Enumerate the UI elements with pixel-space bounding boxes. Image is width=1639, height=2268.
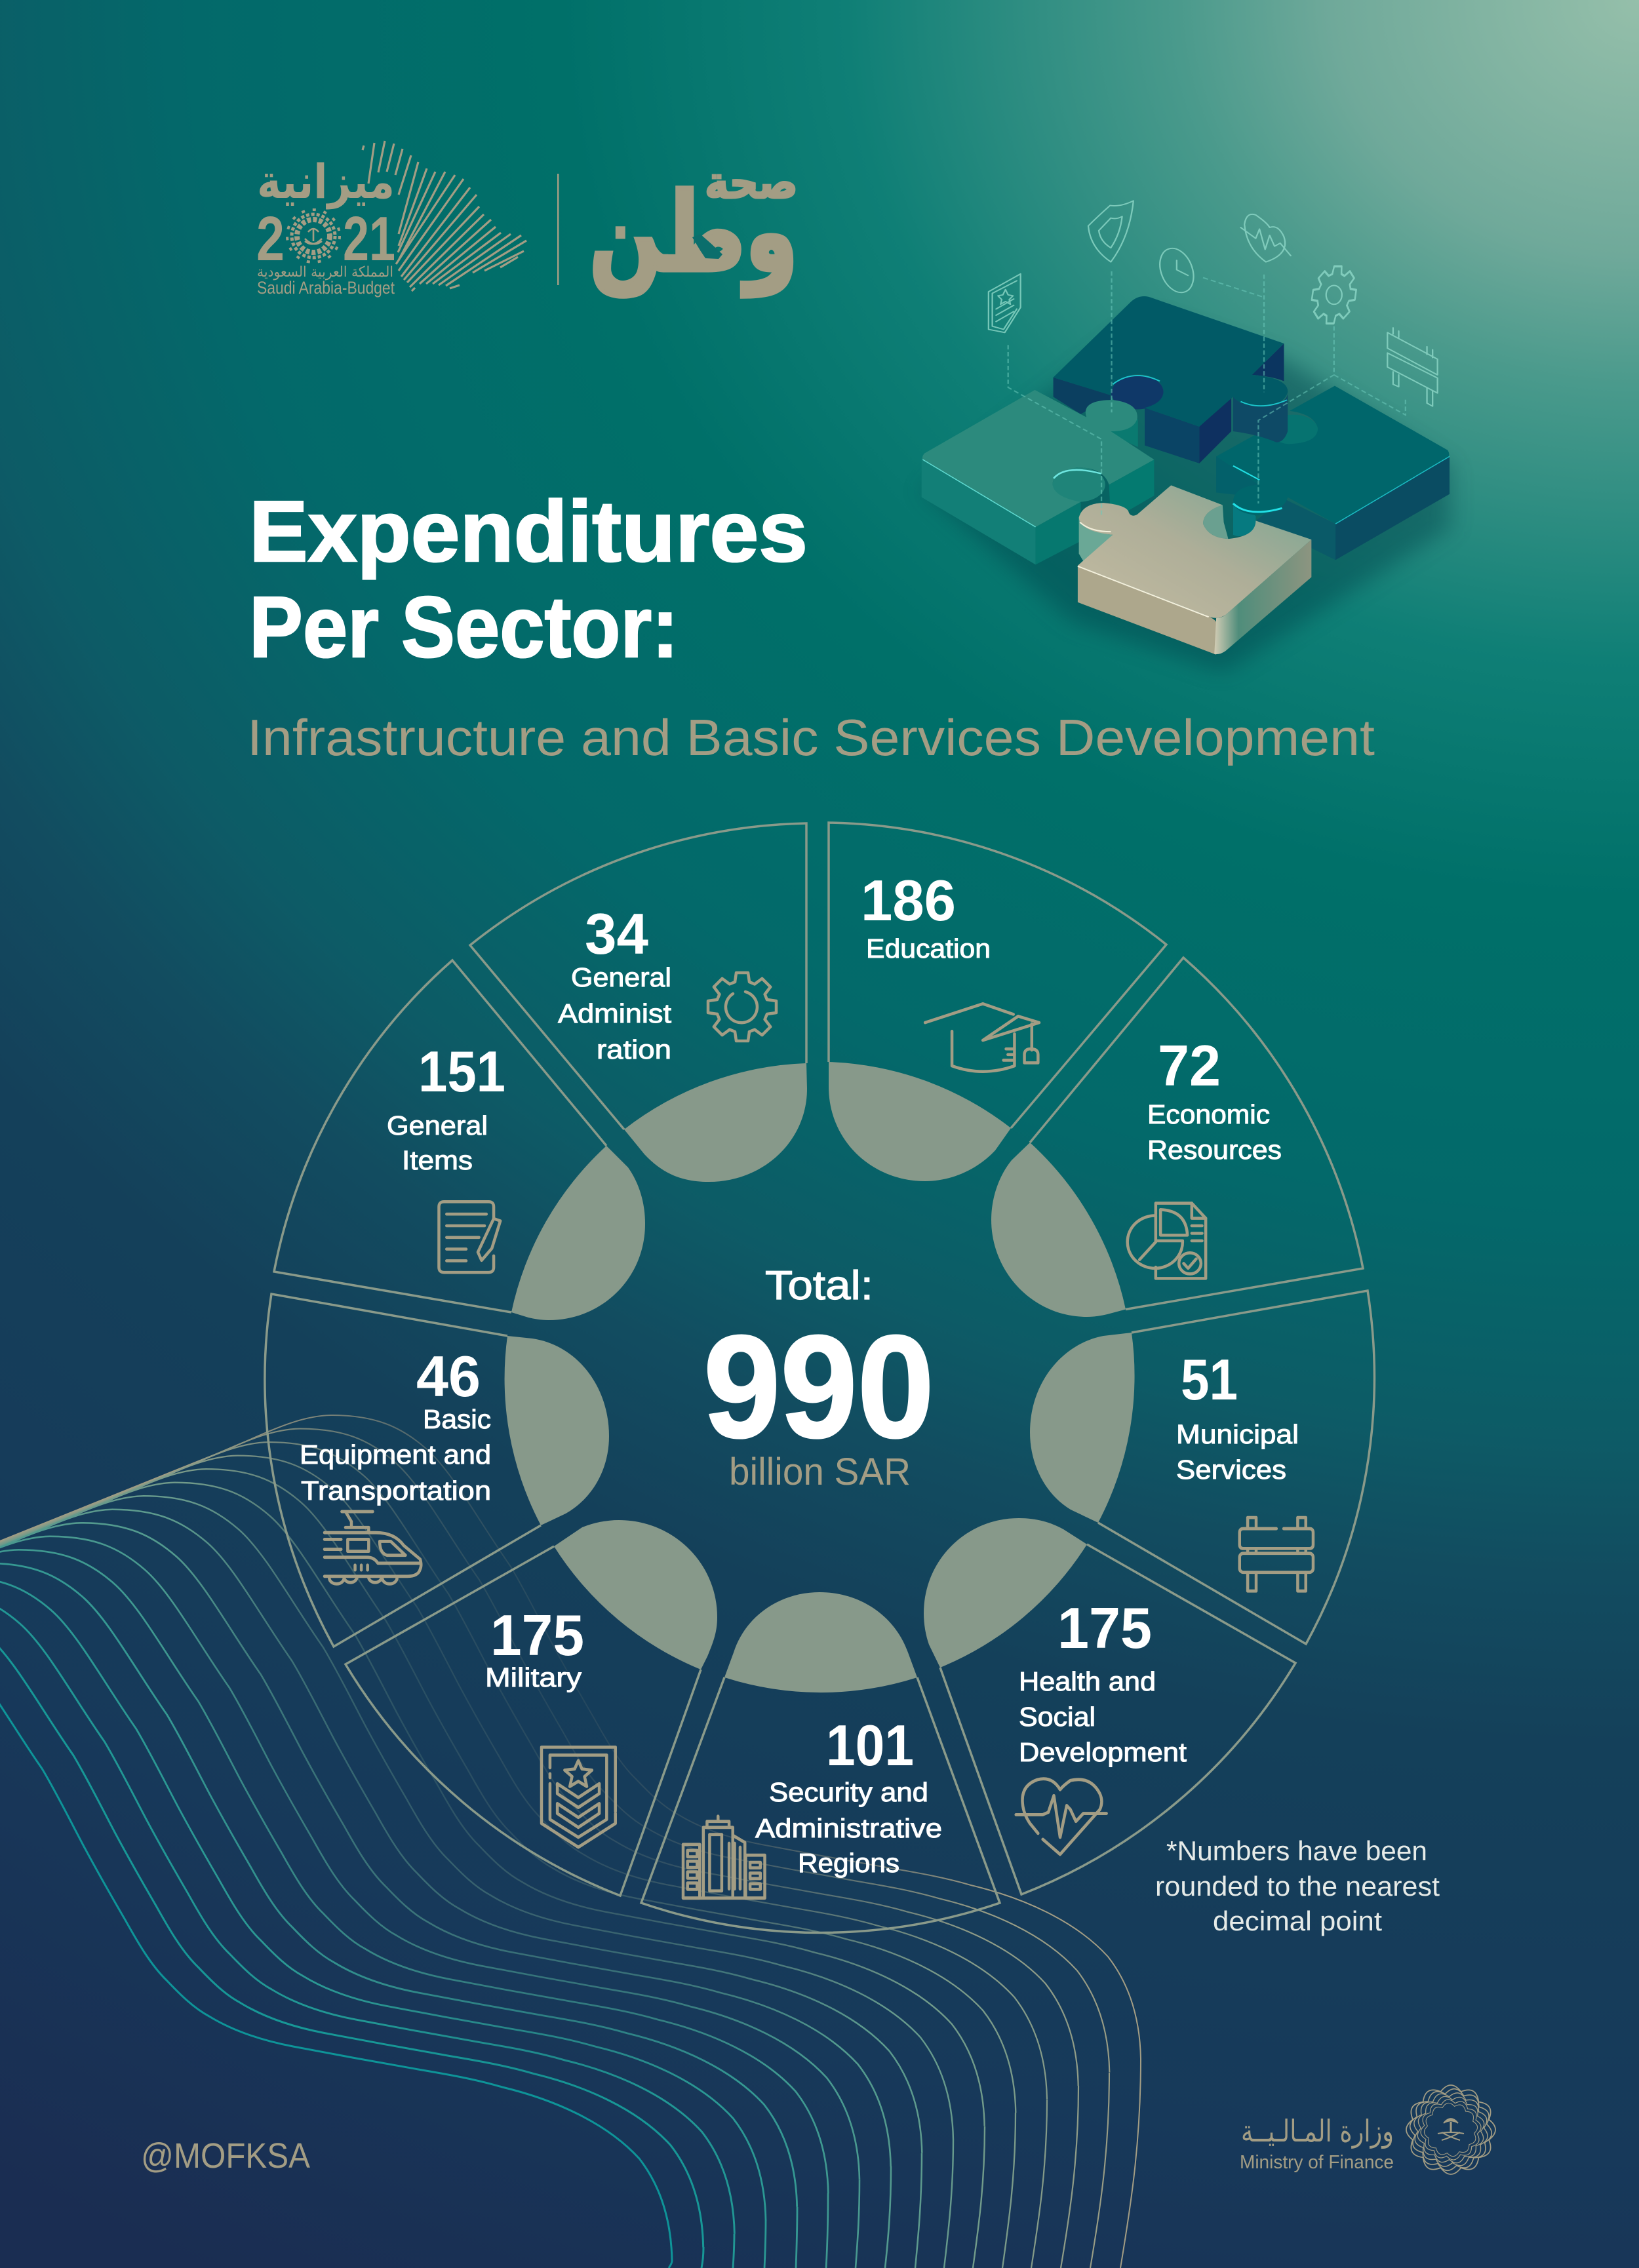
logo arabic caption: المملكة العربية السعودية [257,264,393,281]
puzzle shadow [922,315,1450,673]
logo: vision wordmark [589,157,798,297]
panel: general administration: 34 [585,901,648,966]
panel: education [829,823,1166,1181]
panel: health and social development: Health and [1019,1666,1156,1696]
subtitle: Infrastructure and Basic Services Development [247,709,1375,766]
panel: economic resources [991,958,1363,1317]
panel: education: Education [866,933,991,964]
logo year digits 21: 21 [343,204,395,274]
total: Total: [765,1263,873,1308]
icon: report with pie chart [1128,1203,1206,1278]
floating icon: clock [1155,245,1199,296]
logo arabic word: ميزانية [257,154,395,210]
panel: military [346,1520,717,1896]
dashed connector lines [1008,271,1406,516]
floating icon: shield [1088,201,1134,262]
panel: municipal services: 51 [1181,1347,1238,1412]
total [703,1263,934,1493]
piece: dark teal [1216,386,1450,560]
panel: general items [274,960,645,1320]
panel: general administration: ration [597,1034,671,1065]
panel: security and administrative regions: 101 [826,1713,914,1778]
piece: dark navy [1054,296,1288,463]
panel: basic equipment and transportation: Transportation [301,1476,491,1506]
panel: security and administrative regions: Regions [798,1848,899,1878]
social handle: @MOFKSA [141,2136,310,2176]
icon: road barrier [1240,1517,1313,1591]
ministry english name: Ministry of Finance [1240,2152,1394,2173]
logo english caption: Saudi Arabia-Budget [257,278,395,298]
panel: economic resources: Economic [1147,1099,1270,1129]
total: 990 [703,1306,934,1468]
title: Per Sector: [249,579,679,675]
floating icon: badge [989,274,1021,332]
panel: education: 186 [861,868,956,933]
panel: municipal services [1030,1291,1374,1644]
footnote: decimal point [1213,1906,1382,1936]
title [249,483,808,675]
panel: security and administrative regions [641,1592,1000,1932]
piece: beige [1078,485,1311,655]
panel: basic equipment and transportation [265,1294,609,1647]
panel: basic equipment and transportation: Equipment and [300,1439,491,1470]
icon: buildings [683,1816,765,1898]
wordmark small word: صحة [705,157,798,209]
icon: document with pencil [439,1202,500,1272]
decorative wave lines [0,1415,1141,2268]
panel: security and administrative regions: Security and [769,1777,928,1807]
icon: gear [708,973,776,1041]
icon: train [325,1512,421,1584]
illustration: isometric puzzle [922,201,1450,673]
logo emblem [287,210,340,262]
ministry emblem [1406,2084,1496,2175]
panel: health and social development [924,1518,1295,1894]
panel: general items: General [387,1110,488,1141]
icon: heart pulse [1016,1779,1107,1854]
panel: basic equipment and transportation: 46 [416,1344,481,1409]
floating icon: heart [1240,214,1291,262]
icon: military rank badge [542,1747,616,1847]
panel: health and social development: 175 [1057,1595,1152,1660]
panel: municipal services: Municipal [1176,1419,1299,1449]
panel: municipal services: Services [1176,1455,1286,1485]
panel: general administration: Administ [558,998,672,1028]
logo year digit 2: 2 [256,204,285,274]
panel: economic resources: 72 [1158,1033,1221,1098]
logo map stripes [363,141,526,291]
wordmark map cutout [692,234,722,259]
title: Expenditures [249,483,808,579]
footnote: rounded to the nearest [1155,1871,1440,1902]
footnote: *Numbers have been [1166,1835,1427,1866]
footnote [1155,1835,1440,1936]
floating icon: gear [1309,266,1360,323]
panel: general administration [470,823,807,1182]
panel: military: 175 [490,1603,584,1668]
wordmark large word: وطن [589,170,798,297]
panel: military: Military [485,1662,582,1692]
panel: economic resources: Resources [1147,1135,1282,1165]
panel: health and social development: Social [1019,1702,1096,1732]
panel: general items: 151 [418,1039,505,1104]
panel: security and administrative regions: Administrative [755,1813,942,1843]
panel: basic equipment and transportation: Basic [423,1404,491,1434]
ministry arabic name: وزارة المـالـيــة [1241,2113,1394,2149]
piece: light teal [922,390,1154,564]
logo divider [557,174,559,285]
logo: Saudi Arabia Budget 2021 [256,141,526,298]
panel: health and social development: Development [1019,1737,1187,1767]
logo: ministry of finance [1240,2084,1496,2175]
floating icon: barrier [1387,328,1438,406]
panel: general items: Items [402,1145,473,1175]
icon: graduation cap [925,1004,1039,1072]
total: billion SAR [729,1451,911,1493]
panel: general administration: General [571,962,671,992]
